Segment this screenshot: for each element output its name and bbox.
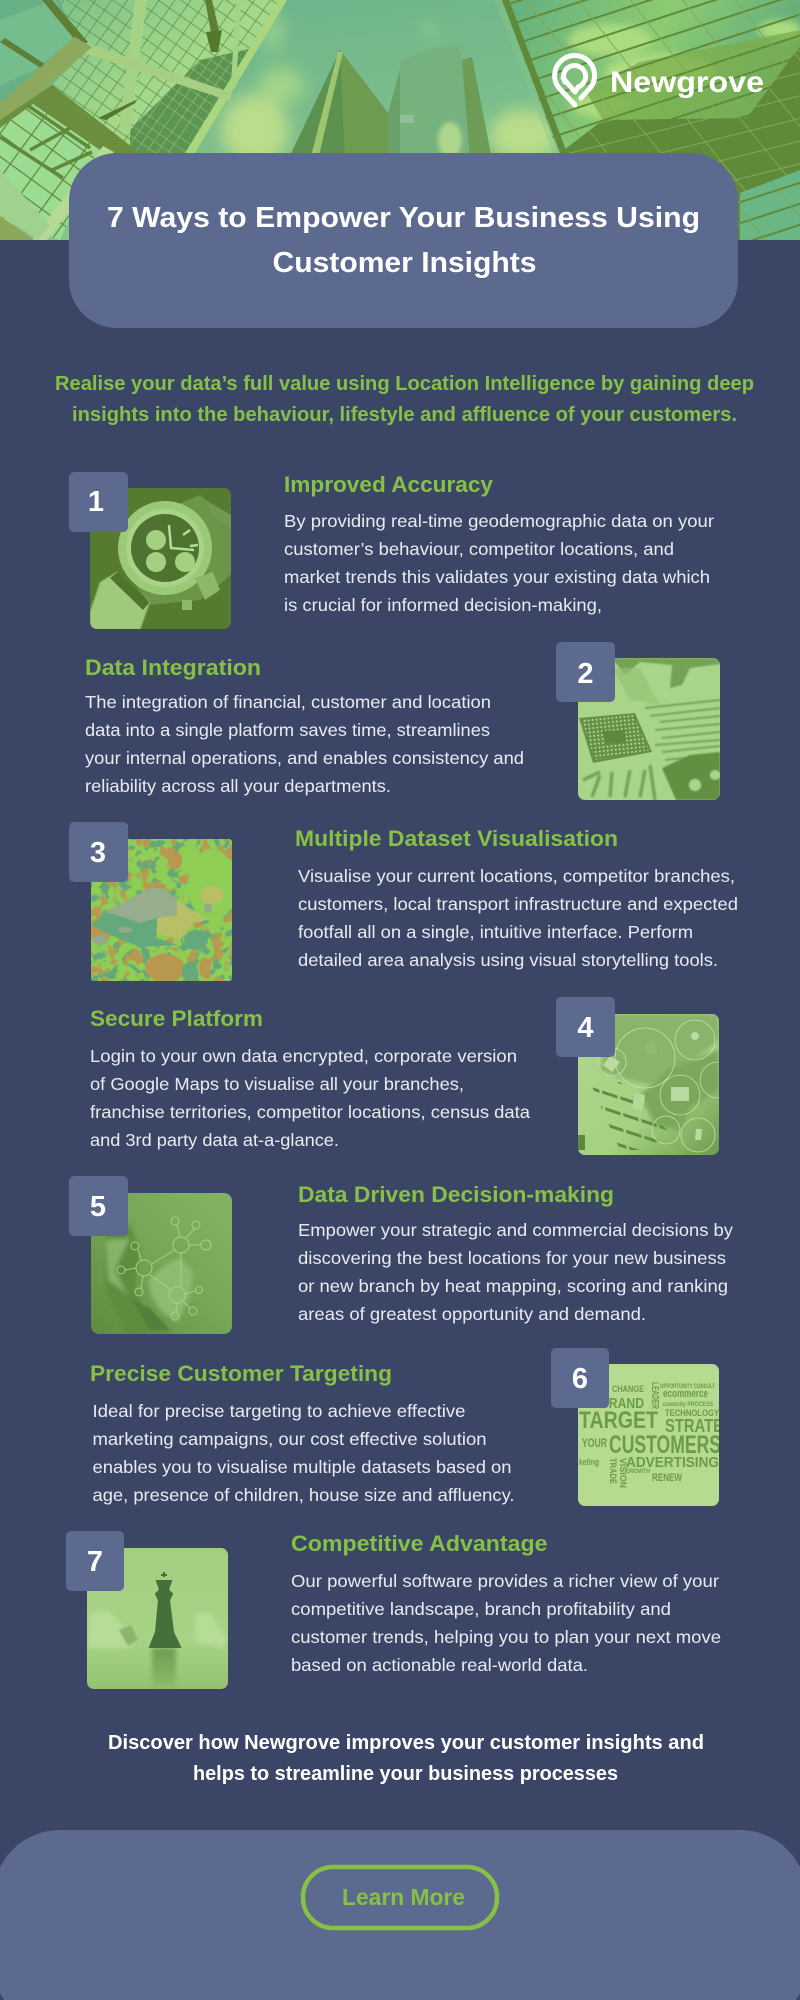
button: Learn More: Learn More xyxy=(342,1884,465,1910)
image: hands on laptop keyboard xyxy=(578,1014,719,1155)
title xyxy=(107,202,700,279)
body text: data into a single platform saves time, streamlines xyxy=(85,720,490,740)
panel: 3 Multiple Dataset Visualisation xyxy=(69,822,738,982)
heading: Competitive Advantage xyxy=(291,1531,548,1556)
number badge 7 xyxy=(66,1531,124,1591)
image: marketing word cloud: LEADER xyxy=(649,1382,660,1410)
number badge 7: 7 xyxy=(87,1546,103,1578)
logo wordmark: Newgrove xyxy=(610,66,764,99)
image: marketing word cloud: ADVERTISING xyxy=(626,1454,719,1471)
image: marketing word cloud: YOUR xyxy=(582,1436,607,1450)
image: luxury watch xyxy=(90,488,231,630)
body text: is crucial for informed decision-making, xyxy=(284,595,602,615)
body text xyxy=(291,1571,721,1675)
icon: location pin xyxy=(555,56,595,105)
number badge 2: 2 xyxy=(577,658,594,690)
body text: Ideal for precise targeting to achieve effective xyxy=(92,1401,466,1421)
image: marketing word cloud: CUSTOMERS xyxy=(609,1431,721,1459)
body text: discovering the best locations for your new business xyxy=(298,1248,726,1268)
call to action text xyxy=(108,1732,704,1785)
image: marketing word cloud: GROWTH xyxy=(626,1469,650,1475)
body text: marketing campaigns, our cost effective solution xyxy=(92,1429,486,1449)
image: chess king xyxy=(87,1548,228,1689)
body text xyxy=(92,1401,514,1505)
image: marketing word cloud: ecommerce xyxy=(663,1388,708,1400)
body text: Empower your strategic and commercial decisions by xyxy=(298,1220,733,1240)
body text: The integration of financial, customer and location xyxy=(85,692,491,712)
heading: Improved Accuracy xyxy=(284,472,494,497)
body text xyxy=(298,866,738,970)
hero photo: city skyscrapers xyxy=(0,0,800,240)
number badge 6: 6 xyxy=(572,1363,588,1395)
body text: market trends this validates your existing data which xyxy=(284,567,710,587)
image: circuit board xyxy=(578,658,720,800)
image: marketing word cloud xyxy=(578,1364,723,1506)
image: marketing word cloud: BRAND xyxy=(600,1395,644,1412)
body text xyxy=(90,1046,530,1150)
body text: of Google Maps to visualise all your branches, xyxy=(90,1074,464,1094)
image: marketing word cloud: RENEW xyxy=(652,1472,682,1484)
panel: 6 Precise Customer Targeting xyxy=(90,1348,723,1506)
number badge 4: 4 xyxy=(577,1012,594,1044)
body text xyxy=(284,511,714,615)
body text: areas of greatest opportunity and demand. xyxy=(298,1304,646,1324)
number badge 1 xyxy=(69,472,128,532)
number badge 5 xyxy=(69,1176,128,1236)
call to action text: helps to streamline your business processes xyxy=(193,1763,618,1785)
intro text xyxy=(55,373,754,426)
body text: based on actionable real-world data. xyxy=(291,1655,588,1675)
number badge 2 xyxy=(556,642,615,702)
body text: Visualise your current locations, competitor branches, xyxy=(298,866,735,886)
title: 7 Ways to Empower Your Business Using xyxy=(107,202,700,234)
image: marketing word cloud: TRADE xyxy=(608,1458,618,1484)
body text: your internal operations, and enables consistency and xyxy=(85,748,524,768)
image: marketing word cloud: CHANGE xyxy=(612,1384,644,1394)
number badge 1: 1 xyxy=(88,486,104,518)
footer panel xyxy=(0,1830,800,2000)
intro text: Realise your data’s full value using Location Intelligence by gaining deep xyxy=(55,373,754,395)
body text xyxy=(85,692,524,796)
call to action text: Discover how Newgrove improves your customer insights and xyxy=(108,1732,704,1754)
body text: customers, local transport infrastructure and expected xyxy=(298,894,738,914)
number badge 3: 3 xyxy=(90,837,106,869)
image: marketing word cloud: keting xyxy=(579,1457,599,1467)
body text: competitive landscape, branch profitability and xyxy=(291,1599,671,1619)
heading: Precise Customer Targeting xyxy=(90,1361,392,1386)
image: marketing word cloud: TARGET xyxy=(579,1407,658,1434)
body text: By providing real-time geodemographic data on your xyxy=(284,511,714,531)
body text: Login to your own data encrypted, corporate version xyxy=(90,1046,517,1066)
heading: Data Driven Decision-making xyxy=(298,1182,614,1207)
body text: customer trends, helping you to plan your next move xyxy=(291,1627,721,1647)
image: marketing word cloud: TECHNOLOGY xyxy=(665,1408,719,1418)
body text: reliability across all your departments. xyxy=(85,776,391,796)
body text: footfall all on a single, intuitive interface. Perform xyxy=(298,922,693,942)
body text: enables you to visualise multiple datasets based on xyxy=(92,1457,512,1477)
body text: franchise territories, competitor locations, census data xyxy=(90,1102,530,1122)
title: Customer Insights xyxy=(272,247,536,279)
title panel xyxy=(69,153,738,328)
heading: Multiple Dataset Visualisation xyxy=(295,826,618,851)
body text: or new branch by heat mapping, scoring and ranking xyxy=(298,1276,728,1296)
panel: 1 Improved Accuracy xyxy=(69,472,714,630)
heading: Secure Platform xyxy=(90,1006,263,1031)
body text: detailed area analysis using visual storytelling tools. xyxy=(298,950,718,970)
body text: Our powerful software provides a richer view of your xyxy=(291,1571,719,1591)
image: hand touching network diagram xyxy=(91,1193,232,1334)
number badge 3 xyxy=(69,822,128,882)
intro text: insights into the behaviour, lifestyle and affluence of your customers. xyxy=(72,404,737,426)
heading: Data Integration xyxy=(85,655,261,680)
number badge 4 xyxy=(556,997,615,1057)
panel: 4 Secure Platform xyxy=(90,997,736,1155)
image: marketing word cloud: OPPORTUNITY CONSULT xyxy=(660,1384,715,1390)
image: marketing word cloud: VISION xyxy=(618,1458,628,1488)
number badge 6 xyxy=(551,1348,609,1408)
image: demographic map xyxy=(90,839,236,982)
image: marketing word cloud: STRATE xyxy=(665,1416,723,1436)
panel: 7 Competitive Advantage xyxy=(66,1531,721,1689)
body text: and 3rd party data at-a-glance. xyxy=(90,1130,339,1150)
image: marketing word cloud: creativity PROCESS xyxy=(663,1402,713,1408)
body text: age, presence of children, house size and affluency. xyxy=(92,1485,514,1505)
button: Learn More xyxy=(303,1867,497,1928)
logo: Newgrove xyxy=(555,56,764,105)
body text xyxy=(298,1220,733,1324)
panel: 5 Data Driven Decision-making xyxy=(69,1176,733,1334)
body text: customer’s behaviour, competitor locations, and xyxy=(284,539,674,559)
panel: 2 Data Integration xyxy=(85,642,720,800)
number badge 5: 5 xyxy=(90,1191,106,1223)
